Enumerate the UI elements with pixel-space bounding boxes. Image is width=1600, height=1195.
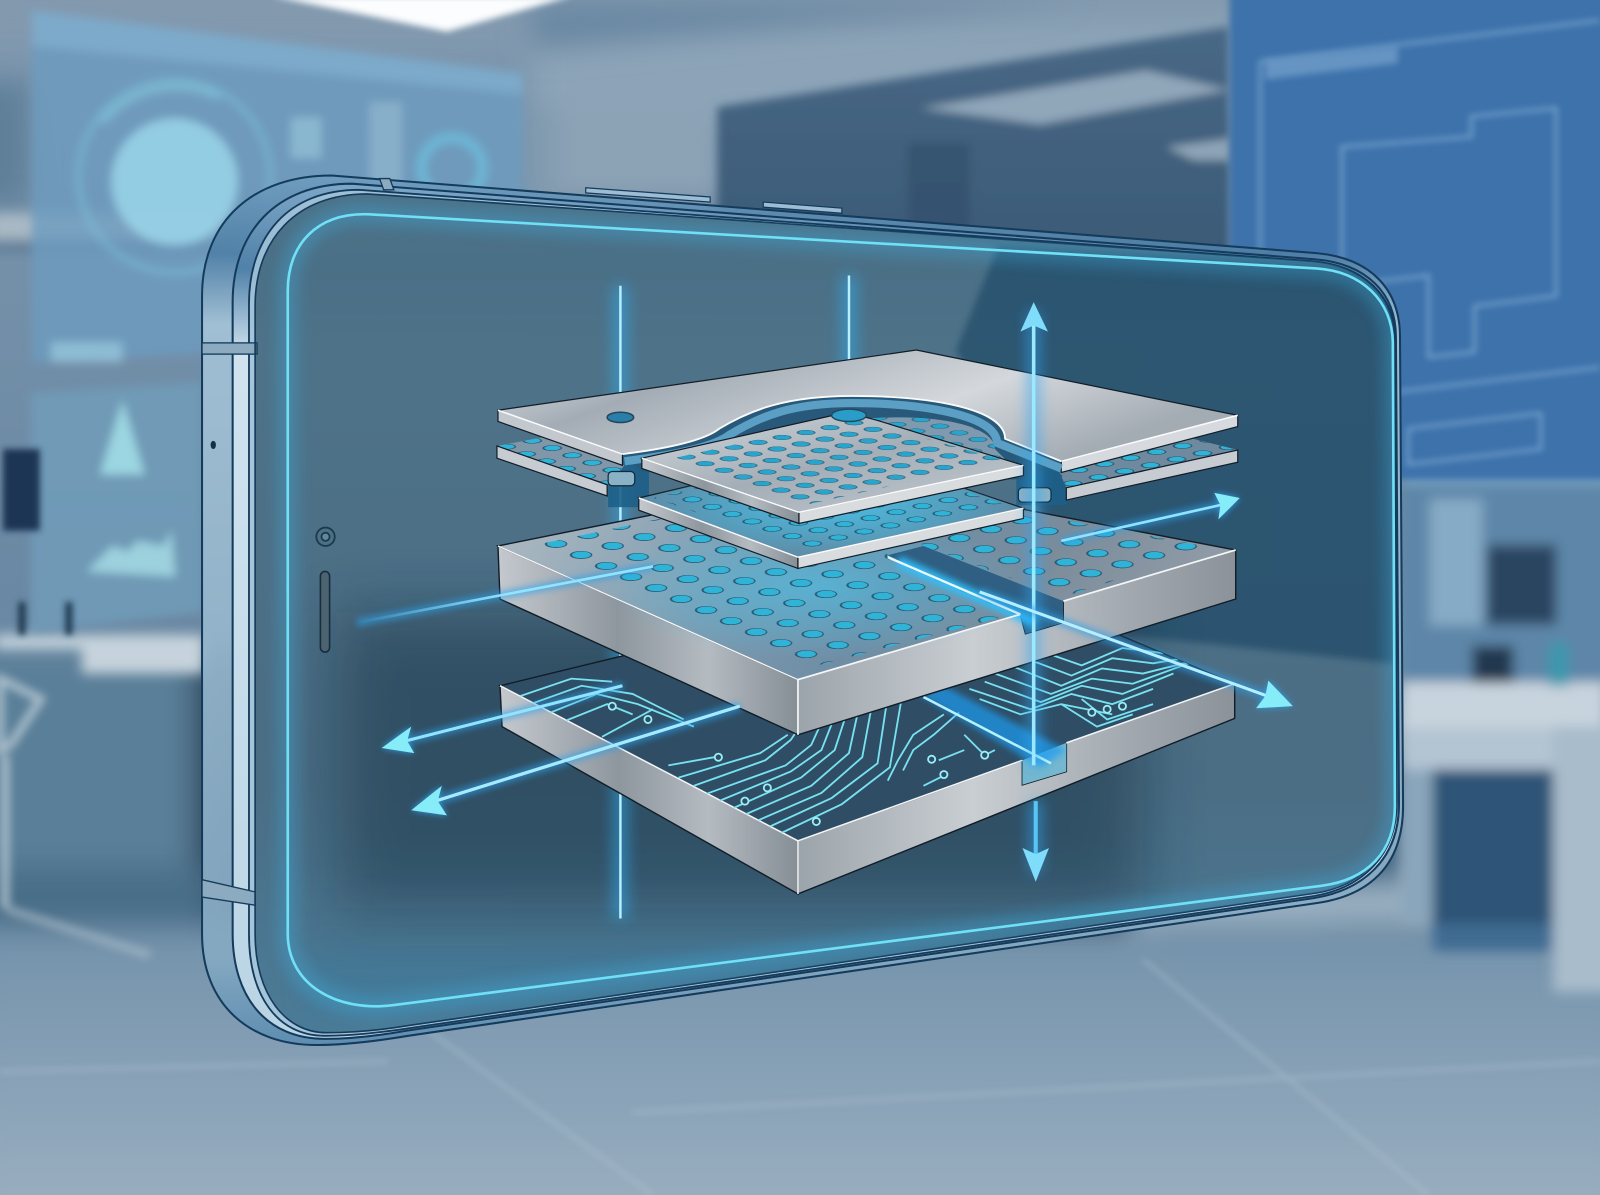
connector posts (608, 471, 1051, 502)
ceiling shadow (528, 0, 1082, 51)
speaker slot (320, 571, 330, 652)
plate via hole (607, 412, 634, 422)
screen glowing border (288, 214, 1395, 1006)
side antenna bands (202, 179, 394, 905)
layer: top steel plate with cutout (498, 350, 1238, 480)
side pinhole (211, 441, 216, 449)
lower cooling channel (918, 686, 1066, 767)
layer: bottom circuit plate (498, 635, 1236, 895)
ceiling light (270, 0, 572, 32)
layer: thin lower perforated plates (497, 434, 1238, 568)
arrow: leftward lower (411, 706, 740, 815)
hologram panel lower left (31, 383, 202, 633)
arrow: rightward down (980, 592, 1293, 708)
channel slot (888, 546, 1063, 634)
phone glass screen (255, 194, 1396, 1033)
floor stand leg (0, 679, 150, 955)
hologram panel upper left (32, 10, 522, 363)
equipment silhouette at left (3, 449, 72, 635)
cutout rim (624, 403, 1061, 468)
glass reflection (956, 247, 1394, 663)
circuit traces (520, 648, 1214, 835)
layer: upper inset perforated plate (642, 409, 1023, 524)
phone body frame (202, 176, 1403, 1045)
glass meeting room (717, 27, 1230, 674)
top side buttons (586, 188, 842, 213)
arrow: vertical up and down (1020, 302, 1049, 882)
blueprint screen right (1230, 0, 1600, 480)
layer: middle perforated block (498, 476, 1236, 735)
arrow: rightward up (357, 493, 1240, 623)
front camera (316, 528, 335, 546)
lower inset plate (639, 449, 1023, 557)
dim room seen through glass (337, 612, 1143, 908)
arrow: leftward upper (382, 686, 622, 753)
rear light beams (620, 276, 849, 918)
